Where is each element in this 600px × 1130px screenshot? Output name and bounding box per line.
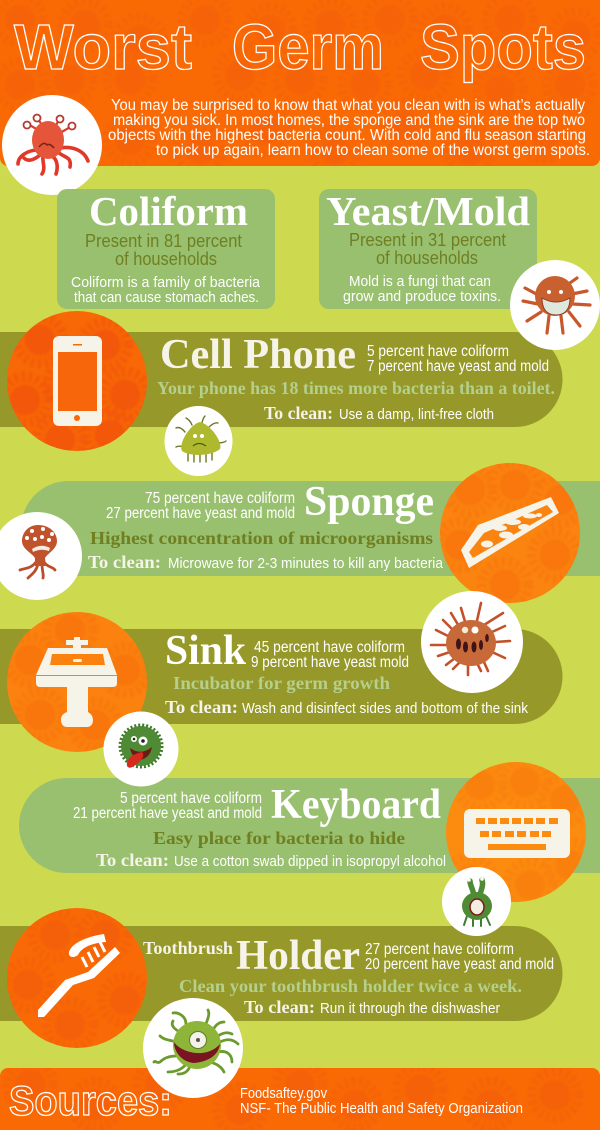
orange circle [437, 462, 583, 608]
section: toothbrush holder [0, 908, 562, 1048]
icon: sponge [461, 497, 559, 568]
stats: cell phone [367, 343, 549, 375]
icon: sink [36, 637, 117, 727]
fact: sink: Incubator for germ growth [173, 673, 390, 693]
prevalence: yeast/mold: of households [376, 248, 478, 268]
section: sponge [21, 462, 600, 608]
heading: toothbrush holder: Holder [236, 933, 360, 979]
stats: toothbrush holder: 27 percent have coliform [365, 941, 514, 958]
stats: keyboard [73, 790, 262, 822]
sources heading: Sources: [9, 1077, 172, 1124]
icon: green tongue germ [104, 712, 178, 786]
orange circle [446, 762, 586, 902]
how to clean: keyboard: To clean: [96, 850, 169, 870]
icon: two-eyed green germ [442, 867, 511, 936]
stats: cell phone: 7 percent have yeast and mold [367, 358, 549, 375]
orange circle [5, 908, 148, 1048]
stats: sink: 45 percent have coliform [254, 639, 405, 656]
description: mold: grow and produce toxins. [343, 288, 501, 305]
stats: keyboard: 5 percent have coliform [120, 790, 262, 807]
prevalence: yeast/mold [349, 230, 506, 268]
how to clean: keyboard [96, 850, 446, 870]
heading: sponge: Sponge [304, 479, 434, 525]
sources list: Foodsaftey.gov [240, 1085, 327, 1102]
description: coliform: that can cause stomach aches. [74, 289, 259, 306]
title: Worst [14, 11, 192, 83]
fact: toothbrush holder: Clean your toothbrush holder twice a week. [179, 976, 522, 996]
orange circle [7, 607, 148, 752]
prevalence: yeast/mold: Present in 31 percent [349, 230, 506, 250]
band [0, 629, 562, 724]
section: sink [0, 607, 562, 752]
how to clean: sink: Wash and disinfect sides and bottom of the sink [242, 700, 528, 717]
prevalence: coliform: Present in 81 percent [85, 231, 242, 251]
stats: toothbrush holder [365, 941, 554, 973]
fact: sponge: Highest concentration of microorganisms [90, 528, 433, 548]
sources list [240, 1085, 523, 1117]
sources list: NSF- The Public Health and Safety Organization [240, 1100, 523, 1117]
description: coliform [71, 274, 261, 306]
stats: keyboard: 21 percent have yeast and mold [73, 805, 262, 822]
heading: yeast/mold: Yeast/Mold [326, 188, 530, 234]
how to clean: sponge: To clean: [88, 552, 161, 572]
description: mold [343, 273, 501, 305]
how to clean: cell phone: Use a damp, lint-free cloth [339, 406, 494, 423]
icon: phone [53, 336, 102, 426]
fact: cell phone: Your phone has 18 times more bacteria than a toilet. [157, 378, 555, 398]
heading: toothbrush holder: Toothbrush [143, 938, 233, 958]
panel: coliform [57, 188, 275, 309]
icon: toothbrush [38, 934, 120, 1017]
icon: red octopus germ [2, 95, 102, 195]
header banner [0, 0, 600, 173]
intro text [108, 97, 590, 159]
section: keyboard [19, 759, 600, 908]
description: coliform: Coliform is a family of bacteria [71, 274, 261, 291]
footer banner [0, 1062, 600, 1130]
title: Germ [232, 11, 384, 83]
how to clean: cell phone: To clean: [264, 403, 333, 423]
band [0, 332, 562, 427]
title [14, 11, 586, 83]
orange circle [7, 311, 147, 451]
heading: toothbrush holder [143, 933, 360, 979]
stats: sink [251, 639, 409, 671]
intro text: You may be surprised to know that what you clean with is what’s actually [111, 97, 585, 114]
icon: keyboard [464, 809, 570, 858]
stats: sponge: 75 percent have coliform [145, 490, 295, 507]
intro text: making you sick. In most homes, the sponge and the sink are the top two [113, 112, 585, 129]
stats: sink: 9 percent have yeast mold [251, 654, 409, 671]
stats: cell phone: 5 percent have coliform [367, 343, 509, 360]
how to clean: keyboard: Use a cotton swab dipped in isopropyl alcohol [174, 853, 446, 870]
icon: red many-eyed germ [0, 512, 82, 600]
how to clean: sink: To clean: [165, 697, 238, 717]
how to clean: sponge [88, 552, 444, 572]
how to clean: toothbrush holder: Run it through the dishwasher [320, 1000, 500, 1017]
section: cell phone [0, 311, 562, 463]
how to clean: toothbrush holder [244, 997, 500, 1017]
heading: cell phone: Cell Phone [160, 332, 356, 378]
panel: yeast and mold [319, 188, 537, 309]
fact: keyboard: Easy place for bacteria to hide [153, 828, 405, 848]
icon: brown spiky germ [421, 591, 523, 693]
prevalence: coliform [85, 231, 242, 269]
prevalence: coliform: of households [115, 249, 217, 269]
icon: brown grinning germ [510, 260, 600, 350]
how to clean: cell phone [264, 403, 494, 423]
band [19, 778, 600, 873]
intro text: objects with the highest bacteria count. With cold and flu season starting [108, 127, 586, 144]
band [0, 926, 562, 1021]
how to clean: toothbrush holder: To clean: [244, 997, 315, 1017]
heading: coliform: Coliform [89, 188, 248, 234]
description: mold: Mold is a fungi that can [349, 273, 491, 290]
intro text: to pick up again, learn how to clean some of the worst germ spots. [156, 142, 590, 159]
band [21, 481, 600, 576]
icon: yellow-green sad germ [164, 406, 232, 476]
stats: sponge [106, 490, 295, 522]
stats: toothbrush holder: 20 percent have yeast and mold [365, 956, 554, 973]
how to clean: sink [165, 697, 528, 717]
heading: keyboard: Keyboard [271, 782, 441, 828]
how to clean: sponge: Microwave for 2-3 minutes to kill any bacteria [168, 555, 444, 572]
heading: sink: Sink [165, 628, 247, 674]
icon: green one-eyed germ [143, 998, 243, 1098]
stats: sponge: 27 percent have yeast and mold [106, 505, 295, 522]
title: Spots [420, 11, 586, 83]
